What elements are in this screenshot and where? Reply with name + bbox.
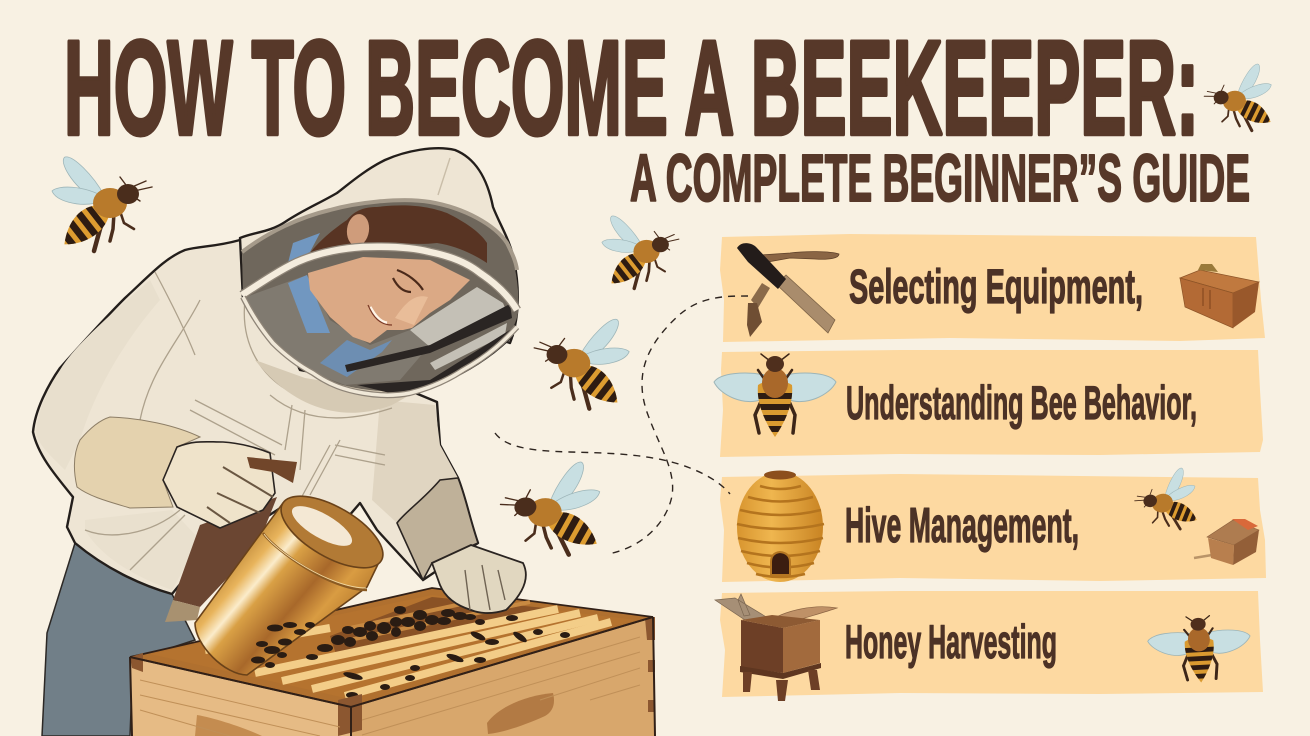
hair (310, 205, 487, 263)
veil rim upper (242, 247, 517, 310)
label: Hive Management, (845, 499, 1079, 553)
left glove (163, 442, 275, 528)
trousers (42, 543, 195, 736)
wooden hive box (130, 588, 655, 736)
jacket shading (36, 280, 160, 470)
veil rim lower (243, 297, 517, 395)
beekeeper figure (33, 148, 526, 675)
jacket folds (85, 272, 395, 570)
top bars (205, 609, 611, 696)
icon: hive stand with tool (715, 594, 837, 701)
icon: bee top view (714, 354, 836, 439)
dark veil strips (345, 304, 512, 372)
icon: beekeeping tool (737, 243, 839, 337)
icon: bee lower middle (495, 460, 612, 571)
light veil section (410, 287, 507, 370)
icon: small hive box (1194, 519, 1259, 565)
left glove cuff (74, 417, 200, 508)
mouth (370, 307, 387, 323)
band: understanding bee behavior (714, 350, 1263, 457)
shirt lower (320, 340, 392, 377)
label: Honey Harvesting (845, 615, 1057, 668)
icon: bee near hood (601, 216, 679, 294)
band: honey harvesting (715, 591, 1263, 701)
ear (345, 213, 371, 247)
face (308, 257, 470, 343)
veil rim top (242, 200, 517, 270)
jacket (33, 240, 478, 594)
icon: bee top view (1147, 614, 1252, 687)
dashed flight path: lower (495, 433, 730, 494)
icon: bee top left (51, 157, 152, 258)
box top interior (130, 588, 653, 707)
icon: bee middle (534, 319, 630, 415)
right glove (432, 545, 526, 613)
icon: wooden box (1180, 264, 1259, 328)
smoker can (195, 503, 380, 675)
band: selecting equipment (720, 234, 1265, 342)
smoker bellows (173, 497, 277, 607)
dashed flight path: upper (608, 296, 748, 554)
shirt collar (288, 233, 320, 263)
shirt (288, 275, 330, 333)
icon: skep hive (737, 470, 824, 582)
hood (240, 148, 518, 343)
icon: flying bee (1130, 466, 1207, 543)
bees on can (251, 622, 315, 668)
right sleeve cuff (397, 478, 478, 580)
smoker handle (247, 457, 297, 483)
icon: bee top right (1200, 62, 1281, 143)
veil mesh (242, 200, 518, 391)
box joints and handles (338, 694, 362, 736)
worker bees (306, 606, 570, 698)
eye and brow (393, 270, 423, 292)
band: hive management (720, 466, 1266, 582)
